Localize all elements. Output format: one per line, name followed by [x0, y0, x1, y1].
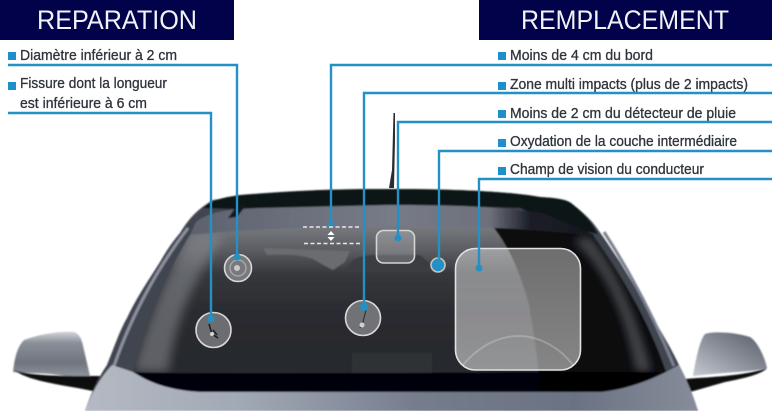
heading: reparation [0, 0, 234, 40]
zone: detecteur de pluie [376, 230, 414, 263]
leader line: moins de 4 cm [327, 65, 772, 226]
right mirror [685, 332, 767, 392]
windshield base [133, 227, 664, 380]
leader line: diametre [8, 65, 240, 260]
text: fissure [8, 75, 167, 112]
text: zone multi impacts: Zone multi impacts (plus de 2 impacts) [510, 76, 748, 93]
text: champ de vision: Champ de vision du conducteur [510, 161, 704, 178]
roof [203, 189, 598, 234]
text: fissure: est inférieure à 6 cm [20, 95, 147, 112]
impact: fissure [196, 312, 231, 348]
right pillar highlight [604, 232, 674, 366]
text: moins de 4 cm: Moins de 4 cm du bord [510, 47, 653, 64]
impact: oxydation [431, 258, 445, 272]
leader line: fissure [8, 113, 214, 322]
left glare [133, 235, 225, 372]
rear window reflection [263, 248, 350, 270]
zone: champ de vision [456, 248, 580, 370]
right cowl dark [539, 372, 649, 392]
leader line: champ de vision [476, 179, 772, 272]
car [13, 189, 767, 411]
left pillar highlight [114, 228, 188, 366]
dash reflection [352, 372, 432, 374]
impact: multi impacts [346, 300, 380, 336]
wiper mount [228, 204, 247, 218]
text: detecteur de pluie: Moins de 2 cm du détecteur de pluie [510, 105, 736, 122]
left mirror [13, 332, 100, 391]
leader line: zone multi impacts [360, 93, 772, 311]
heading: reparation: REPARATION [37, 5, 197, 35]
right swoosh [572, 236, 652, 372]
text: oxydation: Oxydation de la couche intermédiaire [510, 133, 737, 150]
leader line: oxydation [439, 151, 772, 262]
car body [85, 189, 698, 411]
text: diametre: Diamètre inférieur à 2 cm [20, 47, 177, 64]
glass [134, 227, 666, 392]
cowl [120, 372, 660, 392]
heading: remplacement: REMPLACEMENT [521, 5, 729, 35]
top band of windshield [190, 205, 595, 235]
leader line: detecteur de pluie [394, 122, 772, 242]
measure: 4 cm du bord [303, 227, 360, 244]
hood [85, 365, 698, 411]
heading: remplacement [479, 0, 772, 40]
right dark side [494, 227, 666, 378]
impact: etoile 2 cm [224, 254, 252, 282]
seat reflection [349, 255, 430, 266]
text: fissure: Fissure dont la longueur [20, 75, 167, 92]
antenna [389, 113, 395, 188]
